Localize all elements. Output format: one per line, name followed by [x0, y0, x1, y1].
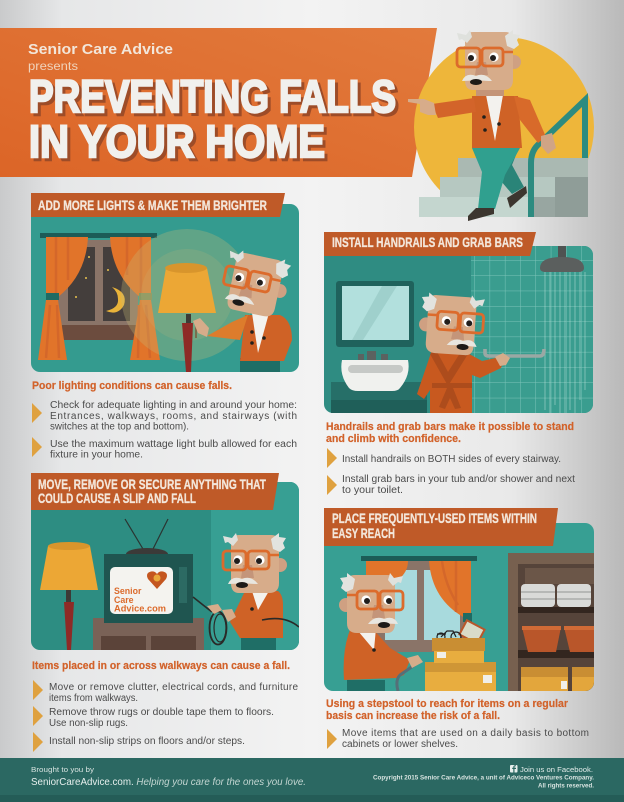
text block: lighting: Entrances, walkways, rooms, and stairways (with [50, 411, 297, 422]
back leg [490, 150, 524, 194]
shirt [486, 95, 503, 141]
text block: lighting [32, 380, 297, 460]
sink [341, 360, 409, 391]
tv screen logo: Care [114, 595, 134, 605]
head [457, 30, 521, 90]
heading: place items: PLACE FREQUENTLY-USED ITEMS WITHIN [332, 511, 537, 526]
right wall [211, 482, 299, 650]
text block: walkways: Move or remove clutter, electrical cords, and furniture [49, 682, 298, 693]
head [223, 533, 287, 593]
closet boxes [521, 667, 594, 691]
heading: add more lights [31, 193, 285, 217]
scene: closet, window and boxes [339, 553, 594, 691]
text block: lighting: fixture in your home. [50, 450, 143, 460]
heading: move, remove or secure: COULD CAUSE A SLIP AND FALL [38, 491, 196, 506]
facebook line: Join us on Facebook. [520, 765, 593, 774]
pants [241, 638, 276, 650]
heading: handrails [324, 232, 536, 256]
shower tile wall [471, 246, 593, 413]
text block: stepstool [326, 698, 589, 750]
towels [521, 584, 591, 607]
grab bar [485, 349, 544, 356]
footer [0, 758, 624, 802]
back shoe [507, 186, 527, 208]
heading: move, remove or secure: MOVE, REMOVE OR SECURE ANYTHING THAT [38, 477, 267, 492]
front shoe [468, 208, 494, 221]
head [339, 573, 403, 633]
right arm and hand [514, 96, 556, 154]
text block: lighting: Use the maximum wattage light bulb allowed for each [50, 439, 297, 450]
robe [417, 350, 505, 413]
panel: handrails and grab bars [324, 246, 593, 413]
water [545, 272, 585, 413]
brand name: Senior Care Advice [28, 42, 173, 58]
curtains [366, 561, 472, 622]
main title [29, 71, 396, 167]
scene: bathroom [331, 246, 593, 413]
text block: handrails: Install grab bars in your tub and/or shower and next [342, 474, 575, 485]
text block: handrails: Handrails and grab bars make it possible to stand [326, 421, 574, 433]
tv knobs [179, 567, 187, 603]
text block: stepstool: cabinets or lower shelves. [342, 739, 458, 750]
text block: lighting: Check for adequate lighting in and around your home: [50, 400, 297, 411]
heading: add more lights: ADD MORE LIGHTS & MAKE THEM BRIGHTER [38, 198, 267, 213]
pointing arm and hand [408, 98, 476, 118]
stacked boxes [425, 638, 496, 691]
faucet [358, 351, 388, 360]
yellow sun circle [414, 38, 594, 190]
shirt [252, 313, 269, 353]
panel: place items within reach [324, 523, 594, 691]
heading: place items [324, 508, 558, 546]
window [372, 560, 468, 652]
counter [331, 382, 427, 413]
antenna [125, 519, 168, 549]
pants [240, 358, 280, 372]
main title: PREVENTING FALLS [29, 71, 396, 122]
text block: walkways: Install non-slip strips on floors and/or steps. [49, 736, 245, 747]
illustration: man walking down stairs [408, 30, 594, 221]
electrical cord [193, 597, 299, 627]
jacket and arm [344, 628, 410, 680]
hand [407, 655, 423, 668]
tv screen logo: Advice.com [114, 604, 166, 614]
title banner [0, 28, 437, 177]
closet [508, 553, 594, 691]
panel: move, remove or secure [31, 482, 299, 650]
mirror [336, 281, 414, 347]
window [58, 240, 138, 340]
panel: add more lights [31, 204, 299, 372]
heading: handrails: INSTALL HANDRAILS AND GRAB BARS [332, 235, 523, 250]
text block: handrails: and climb with confidence. [326, 433, 461, 445]
heading: move, remove or secure [31, 473, 279, 510]
tv screen logo [110, 567, 173, 614]
scene: living room with tv [40, 482, 299, 650]
stairs [419, 158, 588, 217]
facebook icon [510, 765, 518, 772]
arm and hand [193, 315, 248, 340]
text block: walkways: items from walkways. [49, 693, 138, 704]
lamp glow [121, 229, 253, 361]
left curtain [38, 237, 88, 360]
jacket [240, 315, 292, 361]
text block: handrails: Install handrails on BOTH sides of every stairway. [342, 454, 561, 465]
tv body [104, 554, 193, 623]
stool handle [397, 664, 416, 691]
hands [207, 604, 236, 622]
picture frame [459, 620, 485, 644]
rights: All rights reserved. [538, 782, 594, 790]
jacket [230, 591, 283, 638]
copyright: Copyright 2015 Senior Care Advice, a unit of Adviceco Ventures Company. [373, 774, 594, 782]
jacket [472, 96, 522, 148]
text block: walkways [32, 660, 298, 752]
head [222, 250, 291, 316]
text block: lighting: switches at the top and bottom). [50, 422, 189, 432]
shower head [540, 246, 584, 272]
hand [495, 353, 510, 366]
text block: stepstool: Using a stepstool to reach for items on a regular [326, 698, 569, 710]
text block: stepstool: Move items that are used on a daily basis to bottom [342, 728, 589, 739]
tv screen logo: Senior [114, 586, 142, 596]
text block: walkways: Items placed in or across walkways can cause a fall. [32, 660, 290, 672]
text block: lighting: Poor lighting conditions can cause falls. [32, 380, 232, 392]
baskets [522, 626, 594, 652]
text block: stepstool: basis can increase the risk of a fall. [326, 710, 500, 722]
lamp [40, 542, 98, 650]
main title: IN YOUR HOME [29, 116, 325, 167]
front leg [472, 148, 520, 209]
shirt [252, 591, 269, 610]
credit: Brought to you by [31, 767, 95, 774]
scene: window, lamp and man [38, 229, 293, 372]
text block: walkways: Use non-slip rugs. [49, 718, 128, 729]
curtain rod [361, 556, 477, 561]
lamp [158, 263, 216, 372]
curtain rod [40, 233, 157, 238]
shirt [358, 628, 376, 650]
handrail [531, 100, 585, 217]
text block: handrails: to your toilet. [342, 485, 403, 496]
text block: walkways: Remove throw rugs or double tape them to floors. [49, 707, 274, 718]
tv stand [93, 618, 204, 650]
presents: presents [28, 61, 78, 73]
head [417, 292, 485, 356]
tv top [126, 548, 168, 554]
heading: place items: EASY REACH [332, 526, 395, 541]
neck [476, 90, 504, 96]
lapels and belt [430, 350, 472, 409]
right curtain [110, 237, 160, 360]
pants [347, 680, 385, 691]
text block: handrails [326, 421, 575, 496]
website and tagline: SeniorCareAdvice.com. Helping you care for the ones you love. [31, 777, 306, 788]
toy bicycle [437, 631, 461, 642]
